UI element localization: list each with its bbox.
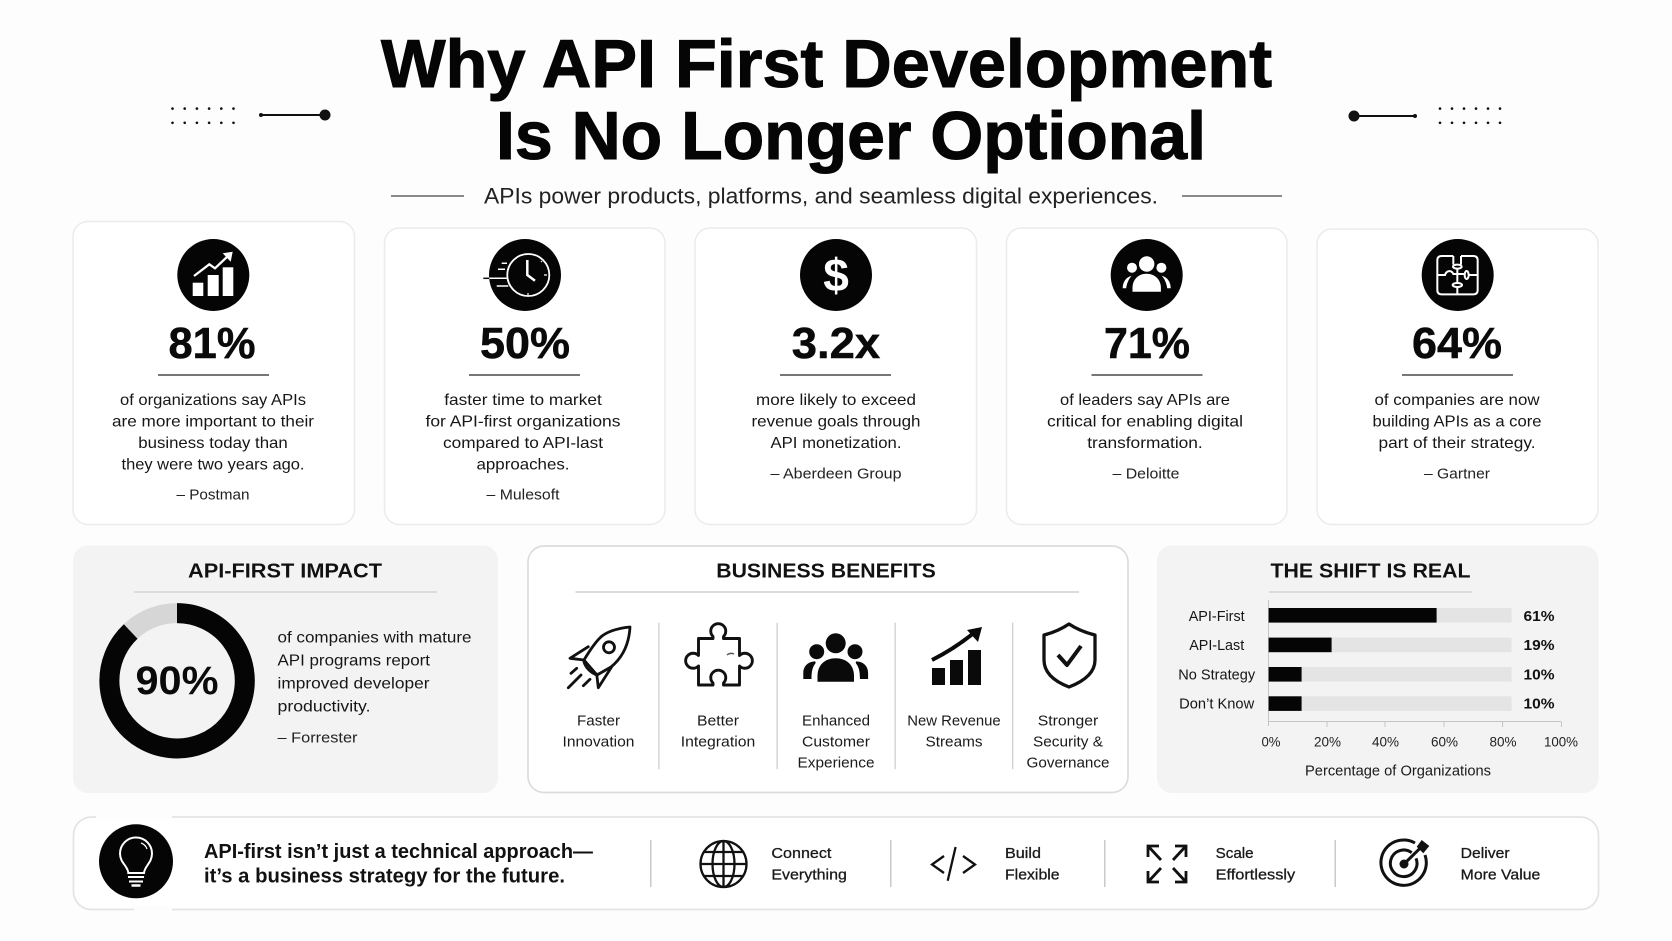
stat description: API monetization.	[770, 435, 902, 452]
stat description: of leaders say APIs are	[1060, 392, 1230, 409]
bar: Don't Know 10%: Don’t Know	[1179, 696, 1255, 712]
axis labels: 20%	[1314, 734, 1341, 750]
stat description: part of their strategy.	[1378, 435, 1536, 452]
heading: THE SHIFT IS REAL	[1270, 561, 1470, 583]
subtitle: APIs power products, platforms, and seamless digital experiences.	[484, 184, 1158, 208]
item: scale effortlessly	[1148, 845, 1296, 883]
icon: fast clock	[483, 239, 561, 311]
left header ornament	[171, 107, 330, 124]
item: deliver more value: More Value	[1461, 866, 1540, 883]
icon: rising bar chart	[177, 239, 249, 311]
right header ornament	[1348, 107, 1501, 124]
item: scale effortlessly: Effortlessly	[1216, 866, 1296, 883]
stat description	[1372, 392, 1542, 452]
benefit: faster innovation	[562, 627, 634, 751]
key message: API-first isn’t just a technical approach—	[204, 841, 593, 863]
bar: API-First 61%: 61%	[1524, 608, 1554, 625]
donut description: improved developer	[278, 676, 430, 692]
icon: dollar	[800, 239, 872, 311]
benefit: new revenue streams: Streams	[926, 734, 982, 751]
panel: stat card 64%	[1317, 229, 1598, 524]
panel: stat card 81%	[73, 222, 354, 524]
donut description: productivity.	[278, 698, 370, 716]
stat description	[1047, 392, 1243, 452]
stat description: for API-first organizations	[426, 414, 620, 430]
item: deliver more value: Deliver	[1461, 845, 1510, 862]
stat value: 3.2x	[792, 319, 881, 368]
stat value: 50%	[480, 319, 570, 368]
stat description: critical for enabling digital	[1047, 414, 1243, 430]
bar: No Strategy 10%: 10%	[1524, 666, 1554, 684]
icon: people	[1111, 239, 1183, 311]
axis labels: 60%	[1431, 734, 1458, 750]
bar: No Strategy 10%	[1178, 666, 1554, 684]
item: build flexible: Flexible	[1005, 866, 1060, 883]
benefit: faster innovation: Innovation	[562, 734, 634, 751]
icon: customers	[803, 633, 868, 682]
donut description: – Forrester	[278, 730, 358, 746]
benefit: enhanced customer experience: Customer	[802, 734, 870, 751]
title	[381, 26, 1272, 174]
benefit: new revenue streams	[907, 627, 1001, 751]
item: scale effortlessly: Scale	[1216, 845, 1254, 862]
stat value: 81%	[168, 319, 256, 368]
stat description: they were two years ago.	[122, 456, 304, 474]
benefit: stronger security and governance: Stronger	[1038, 713, 1098, 730]
benefit: enhanced customer experience: Experience	[798, 755, 874, 772]
source: – Postman	[176, 487, 250, 504]
title: Why API First Development	[381, 26, 1272, 102]
panel: stat card 50%	[384, 228, 665, 524]
benefit: stronger security and governance: Security &	[1033, 734, 1103, 751]
axis labels: 0%	[1262, 734, 1280, 750]
stat description: more likely to exceed	[756, 392, 916, 409]
stat description: of companies are now	[1374, 392, 1540, 409]
stat description: business today than	[138, 435, 288, 452]
icon: target	[1381, 840, 1429, 885]
heading: API-FIRST IMPACT	[188, 561, 382, 583]
stat value: 71%	[1104, 319, 1190, 368]
item: connect everything: Connect	[771, 845, 832, 862]
key message	[204, 841, 593, 888]
item: connect everything	[700, 841, 847, 887]
icon: dollar: $	[823, 249, 849, 301]
benefit: better integration: Integration	[681, 734, 755, 751]
benefit: enhanced customer experience	[798, 633, 874, 772]
item: deliver more value	[1381, 840, 1540, 885]
stat description: transformation.	[1087, 435, 1203, 452]
bar chart	[1178, 600, 1578, 780]
source: – Gartner	[1424, 466, 1490, 483]
icon: rocket	[568, 627, 630, 688]
source: – Mulesoft	[486, 487, 560, 504]
benefit: enhanced customer experience: Enhanced	[802, 713, 870, 730]
key message: it’s a business strategy for the future.	[204, 866, 565, 888]
bar: No Strategy 10%: No Strategy	[1178, 668, 1256, 684]
icon: growth arrow	[932, 627, 982, 685]
heading: BUSINESS BENEFITS	[716, 561, 936, 583]
donut description: API programs report	[278, 652, 431, 670]
source: – Aberdeen Group	[770, 466, 902, 483]
icon: shield	[1044, 624, 1095, 687]
bar: API-First 61%	[1189, 608, 1554, 625]
benefit: better integration	[681, 624, 755, 751]
donut chart 90%: 90%	[136, 659, 218, 703]
bar: API-Last 19%: API-Last	[1189, 638, 1244, 654]
panel: stat card 71%	[1006, 228, 1287, 524]
icon: puzzle piece	[686, 624, 752, 685]
bar: API-First 61%: API-First	[1189, 609, 1245, 625]
stat description: faster time to market	[444, 392, 602, 409]
axis labels: 80%	[1490, 734, 1516, 750]
stat description: revenue goals through	[752, 414, 920, 430]
stat description: are more important to their	[112, 414, 315, 430]
item: build flexible	[932, 845, 1060, 883]
icon: light bulb	[99, 824, 173, 898]
icon: globe	[700, 841, 746, 887]
stat description: of organizations say APIs	[120, 392, 306, 409]
panel: stat card 3.2x	[695, 228, 976, 524]
donut description	[278, 630, 472, 746]
panel: bottom banner	[74, 814, 1598, 912]
benefit: stronger security and governance	[1026, 624, 1110, 772]
stat description: compared to API-last	[443, 435, 604, 452]
item: build flexible: Build	[1005, 845, 1041, 862]
bar: Don't Know 10%	[1179, 696, 1554, 712]
axis labels: 40%	[1372, 734, 1399, 750]
stat description	[752, 392, 920, 452]
bar: API-Last 19%: 19%	[1524, 637, 1554, 654]
stat description	[426, 392, 620, 474]
donut chart 90%	[109, 613, 245, 748]
benefit: stronger security and governance: Governance	[1026, 755, 1110, 772]
stat description: approaches.	[476, 456, 570, 474]
panel: API-first impact	[73, 546, 498, 793]
benefit: faster innovation: Faster	[577, 713, 620, 730]
stat value: 64%	[1412, 319, 1502, 368]
stat description: building APIs as a core	[1372, 414, 1542, 430]
benefit: new revenue streams: New Revenue	[907, 713, 1001, 730]
icon: puzzle	[1422, 239, 1494, 311]
panel: the shift is real	[1157, 546, 1599, 793]
bar: API-Last 19%	[1189, 637, 1554, 654]
axis title: Percentage of Organizations	[1305, 762, 1491, 780]
benefit: better integration: Better	[697, 713, 739, 730]
stat description	[112, 392, 315, 474]
source: – Deloitte	[1112, 466, 1180, 483]
title: Is No Longer Optional	[496, 98, 1206, 174]
panel: business benefits	[528, 546, 1128, 792]
icon: code brackets	[932, 847, 975, 881]
axis labels	[1262, 734, 1578, 750]
axis labels: 100%	[1544, 734, 1578, 750]
icon: expand arrows	[1148, 846, 1186, 882]
bar: Don't Know 10%: 10%	[1524, 696, 1554, 712]
item: connect everything: Everything	[771, 866, 847, 883]
donut description: of companies with mature	[278, 630, 472, 646]
